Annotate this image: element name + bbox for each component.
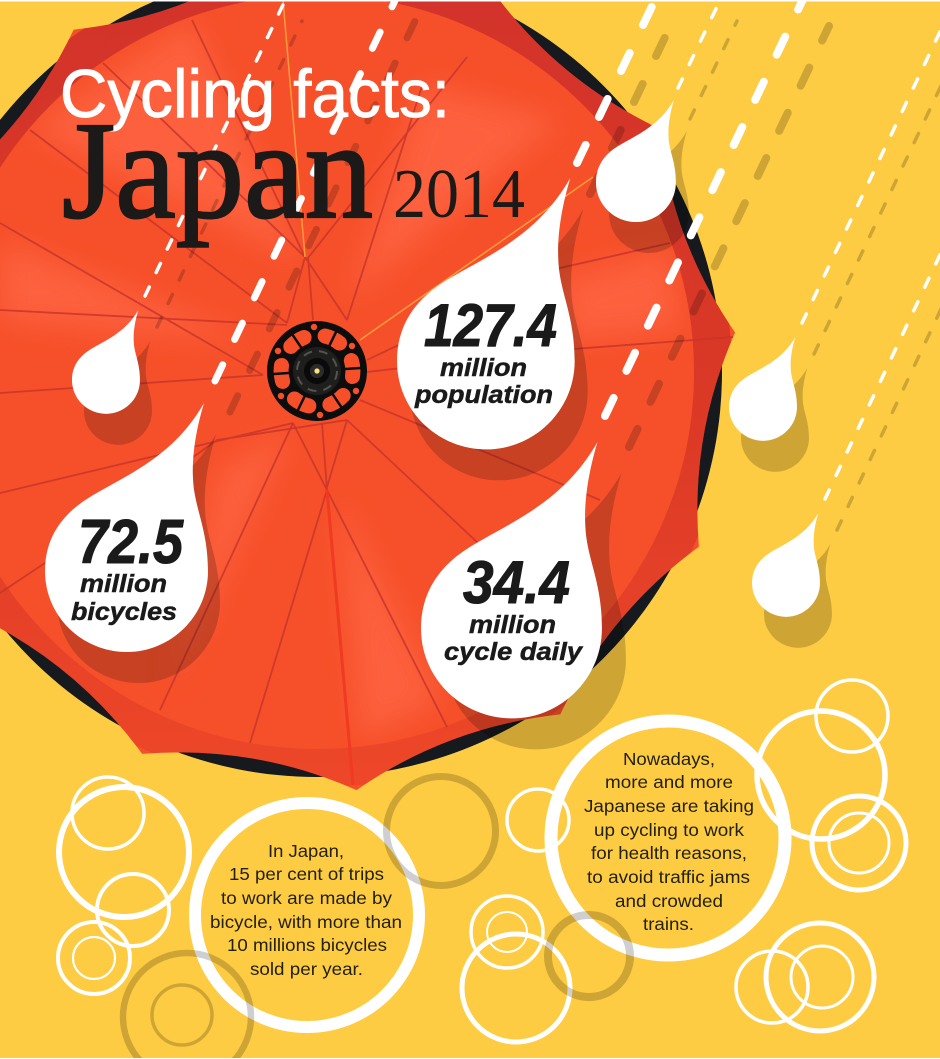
tyre — [0, 0, 722, 777]
paragraph: trains. — [643, 914, 694, 934]
paragraph: for health reasons, — [591, 843, 747, 863]
bicycle wheel — [0, 0, 735, 790]
drop: bicycles — [45, 403, 208, 652]
paragraph — [584, 749, 754, 934]
stat: population — [414, 292, 557, 409]
stat: cycle daily — [444, 549, 583, 666]
paragraph: up cycling to work — [594, 820, 744, 840]
title — [60, 56, 525, 248]
label: million — [80, 570, 167, 598]
title line: cycling facts: Cycling facts: — [60, 56, 450, 132]
right bubble cluster — [462, 680, 906, 1042]
paragraph: to work are made by — [221, 888, 392, 908]
white drops — [45, 100, 820, 718]
drop: small left — [72, 310, 140, 414]
drop: top right — [596, 100, 676, 222]
paragraph: bicycle, with more than — [210, 912, 402, 932]
paragraph: Nowadays, — [623, 749, 715, 769]
paragraph: 15 per cent of trips — [229, 864, 384, 884]
stat: bicycles — [71, 508, 184, 626]
drop: middle right — [729, 337, 797, 441]
paragraph: to avoid traffic jams — [587, 867, 750, 887]
paragraph: Japanese are taking — [584, 796, 754, 816]
label: million — [469, 611, 556, 639]
label: bicycles — [71, 598, 177, 626]
drop: population — [397, 178, 575, 449]
number: 127.4 — [424, 292, 557, 359]
label: population — [414, 381, 553, 409]
paragraph: In Japan, — [268, 841, 344, 861]
paragraph: sold per year. — [250, 959, 363, 979]
wheel hub — [267, 321, 367, 421]
title line: year: 2014 — [393, 156, 525, 233]
drop: cycle daily — [421, 442, 602, 718]
paragraph: 10 millions bicycles — [227, 935, 387, 955]
rain trail and drop shadows — [57, 21, 940, 749]
number: 34.4 — [463, 549, 570, 616]
label: million — [440, 354, 527, 382]
paragraph: more and more — [605, 772, 733, 792]
bubble with text: cycling to work — [551, 721, 785, 955]
left bubble cluster — [58, 776, 496, 1059]
umbrella canopy — [0, 0, 735, 790]
title line: Japan: Japan — [62, 94, 373, 248]
drop: lower right — [752, 513, 820, 617]
paragraph: and crowded — [615, 891, 723, 911]
white rain trails — [145, 0, 940, 499]
number: 72.5 — [78, 508, 184, 577]
bubble with text: trips to work — [195, 803, 419, 1027]
label: cycle daily — [444, 638, 583, 666]
paragraph — [210, 841, 402, 979]
